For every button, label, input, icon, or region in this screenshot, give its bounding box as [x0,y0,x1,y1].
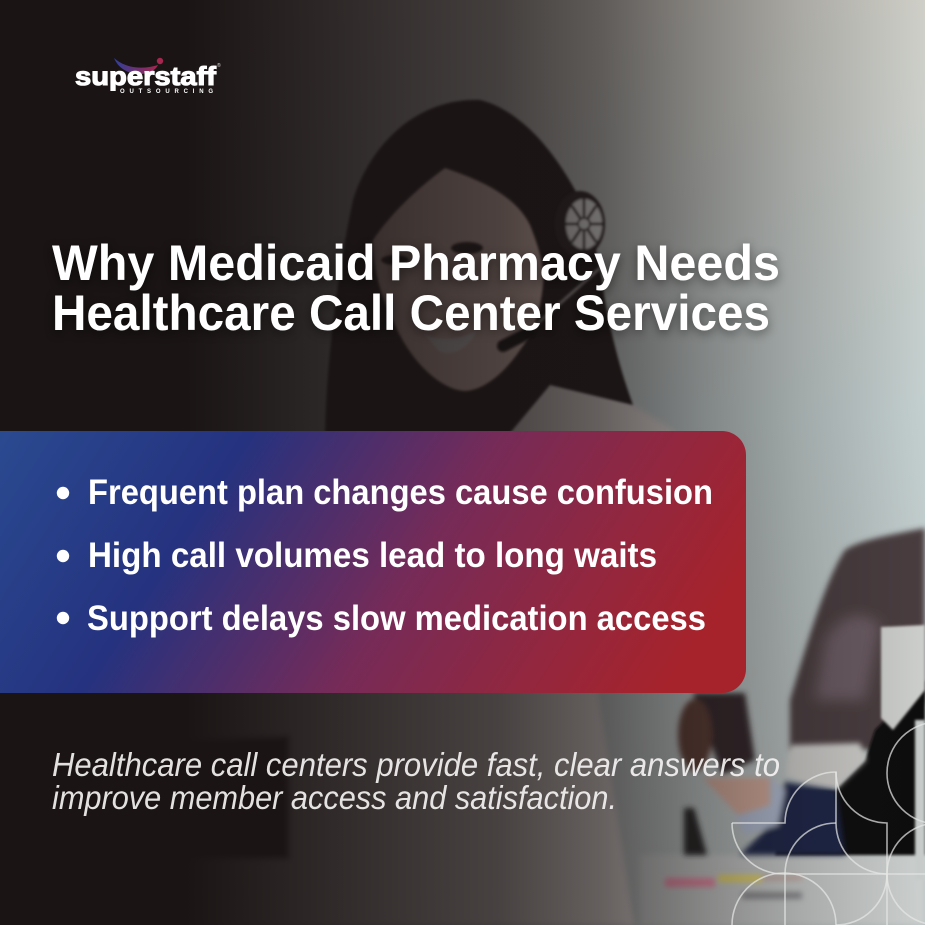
logo dot [157,58,163,64]
man in dark jacket [790,528,925,750]
logo: superstaff outsourcing [75,58,221,95]
title: Why Medicaid Pharmacy Needs [52,235,780,291]
logo tagline: OUTSOURCING [120,89,213,95]
woman: eyes and smile [381,242,483,353]
monitor back [881,625,925,880]
logo wordmark: superstaff [75,61,216,91]
panel: key problems [0,431,746,693]
bullet: plan changes: Frequent plan changes cause confusion [88,473,713,512]
desk items [665,808,802,899]
decorative line art [732,722,925,925]
logo swoosh [114,58,158,74]
woman: hair [325,100,633,445]
title [52,235,780,341]
bullet: call volumes: High call volumes lead to long waits [88,536,657,575]
closing statement [52,746,780,816]
woman: blazer [160,360,676,925]
closing statement: improve member access and satisfaction. [52,779,617,816]
hand and tablet [678,693,770,815]
desk surface [640,855,925,925]
man's navy sleeve and cuff [735,778,845,855]
man: dark torso [775,680,925,855]
logo registered mark: ® [217,62,221,69]
closing statement: Healthcare call centers provide fast, clear answers to [52,746,780,783]
title: Healthcare Call Center Services [52,285,770,341]
woman: face [373,168,543,391]
headset microphone [503,268,600,346]
headset earpiece [555,191,605,257]
panel background [0,431,746,693]
man: pale sleeve band [786,743,866,790]
bullet: support delays: Support delays slow medication access [87,599,706,638]
